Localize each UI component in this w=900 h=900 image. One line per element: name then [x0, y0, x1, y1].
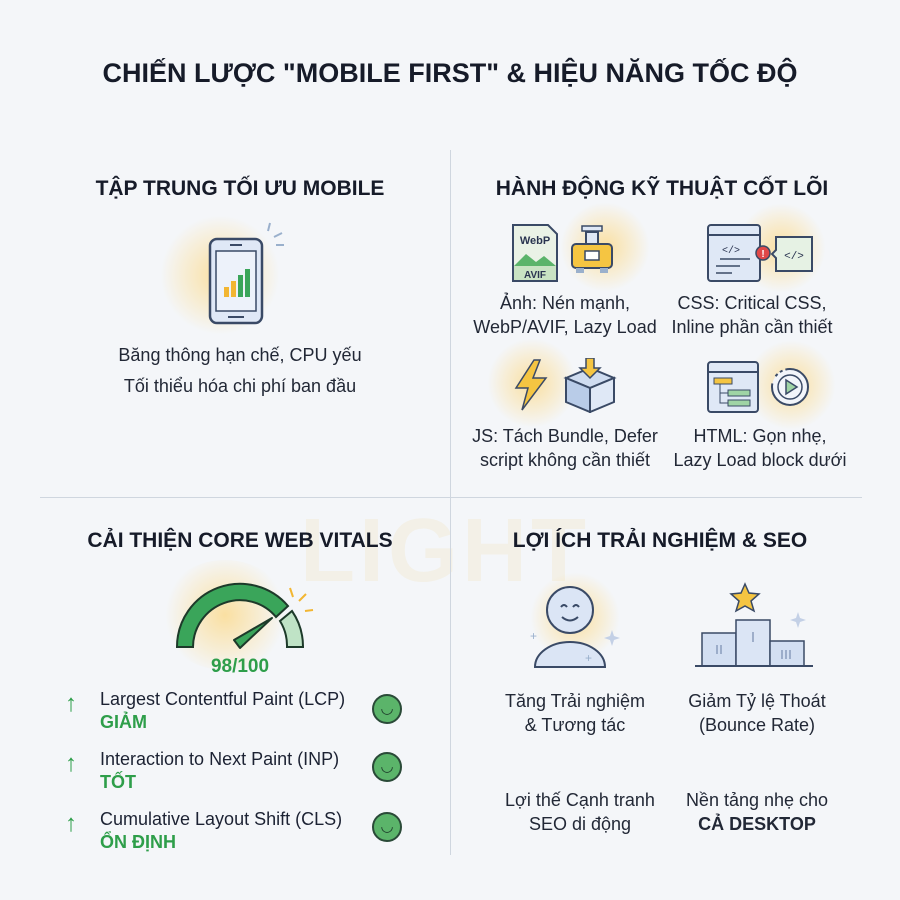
- metric: LCP: [65, 689, 402, 732]
- metric: CLS: ◡: [380, 818, 394, 835]
- metric: INP: ◡: [380, 758, 394, 775]
- text: desktop: CẢ DESKTOP: [698, 814, 816, 834]
- chart: gauge: 98/100: [211, 656, 269, 677]
- metric: INP: Interaction to Next Paint (INP): [100, 749, 339, 769]
- text: images: WebP/AVIF, Lazy Load: [473, 317, 657, 337]
- icon: smiling user: [530, 576, 620, 668]
- text: engagement: & Tương tác: [525, 715, 625, 735]
- text: js: [472, 426, 658, 470]
- text: desktop: Nền tảng nhẹ cho: [686, 790, 828, 810]
- text: bounce: [688, 691, 826, 735]
- text: seo: Lợi thế Cạnh tranh: [505, 790, 655, 810]
- metric: LCP: ↑: [65, 690, 77, 717]
- metric: INP: TỐT: [100, 772, 136, 792]
- icon: images: [512, 206, 646, 288]
- heading: actions: HÀNH ĐỘNG KỸ THUẬT CỐT LÕI: [496, 177, 828, 200]
- heading: cwv: CẢI THIỆN CORE WEB VITALS: [87, 529, 393, 552]
- metric: LCP: GIẢM: [100, 712, 147, 732]
- text: js: script không cần thiết: [480, 450, 650, 470]
- panel: core web vitals: [65, 528, 402, 852]
- icon: html: [707, 344, 832, 426]
- panel: mobile focus: [96, 176, 384, 396]
- text: seo: [505, 790, 655, 834]
- metric: LCP: Largest Contentful Paint (LCP): [100, 689, 345, 709]
- icon: smiling user: +: [530, 629, 537, 643]
- icon: podium: [695, 582, 813, 667]
- icon: css: </>: [722, 245, 740, 257]
- icon: css: [707, 208, 822, 288]
- text: bounce: (Bounce Rate): [699, 715, 815, 735]
- icon: js: [492, 342, 616, 424]
- text: images: [473, 292, 657, 337]
- text: mobile constraints: Băng thông hạn chế, CPU yếu: [118, 345, 362, 365]
- heading: benefits: LỢI ÍCH TRẢI NGHIỆM & SEO: [513, 529, 807, 552]
- text: html: Lazy Load block dưới: [674, 450, 846, 470]
- icon: images: AVIF: [524, 270, 546, 281]
- heading: mobile: TẬP TRUNG TỐI ƯU MOBILE: [96, 177, 384, 200]
- text: seo: SEO di động: [529, 814, 631, 834]
- text: css: Inline phần cần thiết: [671, 317, 833, 337]
- text: html: HTML: Gọn nhẹ,: [693, 426, 827, 446]
- text: mobile constraints: Tối thiểu hóa chi phí ban đầu: [124, 376, 356, 396]
- metric: CLS: [65, 809, 402, 852]
- title: CHIẾN LƯỢC "MOBILE FIRST" & HIỆU NĂNG TỐC ĐỘ: [102, 58, 798, 88]
- metric: CLS: ↑: [65, 810, 77, 837]
- text: images: Ảnh: Nén mạnh,: [500, 293, 630, 313]
- text: engagement: [505, 691, 645, 735]
- chart: gauge: [171, 561, 314, 677]
- metric: CLS: ỔN ĐỊNH: [100, 832, 176, 852]
- text: css: [671, 293, 833, 337]
- icon: css: !: [761, 249, 765, 260]
- panel: core technical actions: [472, 176, 846, 470]
- watermark: LIGHT: [300, 501, 590, 601]
- text: engagement: Tăng Trải nghiệm: [505, 691, 645, 711]
- list: metrics: [65, 689, 402, 852]
- text: css: CSS: Critical CSS,: [677, 293, 827, 313]
- metric: LCP: ◡: [380, 700, 394, 717]
- icon: images: WebP: [520, 235, 550, 247]
- panel: benefits: [505, 528, 828, 834]
- metric: INP: ↑: [65, 750, 77, 777]
- icon: phone: [166, 221, 284, 329]
- metric: INP: [65, 749, 402, 792]
- icon: smiling user: +: [585, 651, 592, 665]
- text: desktop: [686, 790, 828, 834]
- text: js: JS: Tách Bundle, Defer: [472, 426, 658, 446]
- text: html: [674, 426, 846, 470]
- text: bounce: Giảm Tỷ lệ Thoát: [688, 691, 826, 711]
- text: mobile constraints: [118, 345, 362, 396]
- metric: CLS: Cumulative Layout Shift (CLS): [100, 809, 342, 829]
- icon: css: </>: [784, 251, 804, 263]
